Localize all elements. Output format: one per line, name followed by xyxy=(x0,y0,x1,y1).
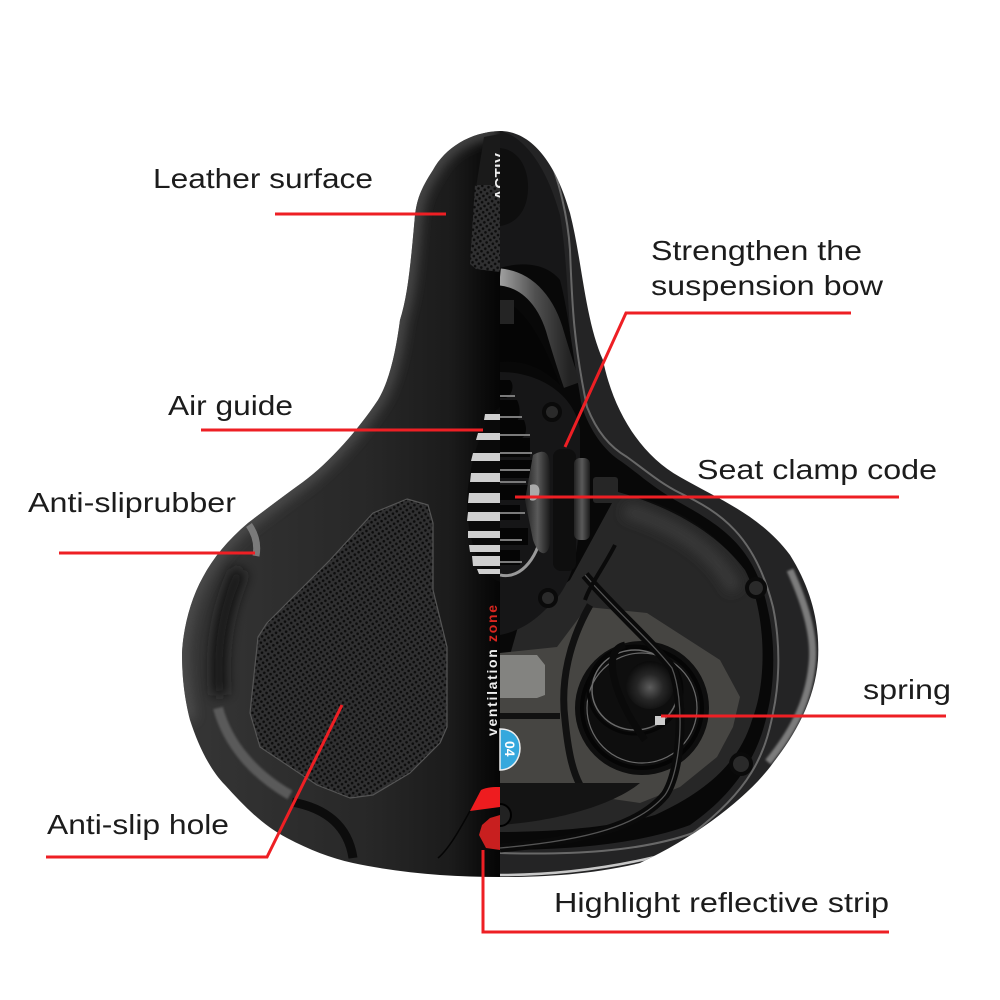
reflector: red textured xyxy=(479,815,500,850)
badge xyxy=(500,729,520,770)
bow highlight xyxy=(500,277,572,385)
foam divider xyxy=(500,713,560,719)
saddle: left outer half xyxy=(182,131,500,877)
small block xyxy=(500,300,514,324)
cables xyxy=(500,545,680,848)
callout: Highlight reflective strip xyxy=(483,850,889,932)
callout: Anti-sliprubber: Anti-sliprubber xyxy=(28,487,236,518)
outer rim sheen xyxy=(768,570,813,762)
rim highlight line xyxy=(500,148,778,854)
saddle: right inner half xyxy=(489,131,818,877)
bolt hole xyxy=(500,803,512,827)
strip: side sheen xyxy=(218,708,290,795)
plate xyxy=(500,372,580,635)
air guide fins: right xyxy=(500,380,538,578)
callout: Strengthen the suspension bow: Strengthen the xyxy=(651,235,862,266)
recess disc xyxy=(575,641,709,775)
anti-slip panel xyxy=(250,499,447,798)
foam light panel xyxy=(500,655,545,698)
callout: Air guide: Air guide xyxy=(168,390,293,421)
nose logo text: ACTIV xyxy=(492,153,509,200)
label: ventilation zone: ventilation zone xyxy=(484,605,500,736)
badge: 04 xyxy=(502,741,518,757)
callout: Strengthen the suspension bow: suspension bow xyxy=(651,270,884,301)
callout: Anti-slip hole: Anti-slip hole xyxy=(47,809,229,840)
foam region xyxy=(500,607,740,803)
rim dark inner band xyxy=(500,264,773,850)
leather sheen xyxy=(625,510,735,590)
nose interior xyxy=(500,131,570,330)
foam edge groove xyxy=(564,605,590,785)
strip: lower dark groove xyxy=(292,802,353,858)
callout: Anti-slip hole xyxy=(46,705,342,857)
bottom bright rim xyxy=(500,857,655,875)
strip: anti-slip rubber highlight xyxy=(249,525,257,556)
callout: spring: spring xyxy=(863,674,951,705)
spring tip xyxy=(655,716,665,725)
nose dotted panel xyxy=(470,134,500,272)
callout: Seat clamp code: Seat clamp code xyxy=(697,454,937,485)
callout: Highlight reflective strip: Highlight reflective strip xyxy=(554,887,889,918)
dark lower band xyxy=(500,783,640,825)
reflector: contour xyxy=(438,811,470,858)
seat leather xyxy=(500,492,763,832)
callout: Strengthen the suspension bow xyxy=(565,235,884,447)
cavity xyxy=(500,300,560,385)
clamp xyxy=(525,449,618,571)
nose texture xyxy=(470,185,500,272)
nose round recess xyxy=(500,148,528,226)
reflector: red top xyxy=(470,787,500,811)
spring coils xyxy=(582,646,702,768)
rubber ball xyxy=(630,667,670,708)
screws xyxy=(540,404,765,774)
callout: Leather surface: Leather surface xyxy=(153,163,373,194)
air guide fins: left xyxy=(467,407,500,582)
